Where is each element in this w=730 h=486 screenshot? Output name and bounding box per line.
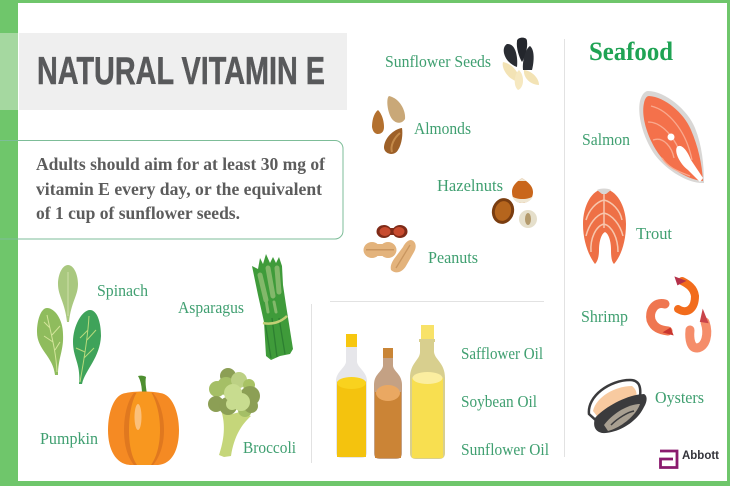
panel: seafood (581, 37, 719, 468)
label: Trout: Trout (636, 224, 672, 243)
icon: almonds (372, 96, 405, 154)
label: Sunflower Oil: Sunflower Oil (461, 440, 549, 459)
icon: oyster (589, 380, 647, 433)
label: Pumpkin: Pumpkin (40, 429, 98, 448)
icon: trout steak (583, 188, 626, 264)
icon: hazelnuts (489, 178, 537, 228)
label: Salmon: Salmon (582, 130, 630, 149)
callout: daily recommendation: of 1 cup of sunflower seeds. (36, 203, 240, 223)
label: Spinach: Spinach (97, 281, 148, 300)
icon: asparagus (252, 254, 293, 360)
label: Oysters: Oysters (655, 388, 704, 407)
label: Shrimp: Shrimp (581, 307, 628, 326)
label: Almonds: Almonds (414, 119, 471, 138)
logo: Abbott (660, 448, 719, 468)
icon: sunflower seeds (503, 38, 539, 90)
icon: spinach (37, 265, 101, 384)
panel: vegetables (37, 254, 296, 465)
title banner: NATURAL VITAMIN E (37, 50, 325, 93)
label: Sunflower Seeds: Sunflower Seeds (385, 52, 491, 71)
callout: daily recommendation: Adults should aim for at least 30 mg of (36, 154, 326, 174)
icon: soybean oil bottle (374, 348, 402, 459)
label: Broccoli: Broccoli (243, 438, 296, 457)
icon: peanuts (364, 225, 416, 272)
logo: Abbott: Abbott (682, 448, 719, 462)
label: Safflower Oil: Safflower Oil (461, 344, 543, 363)
icon: safflower oil bottle (336, 334, 367, 458)
panel: oils (336, 325, 549, 459)
title banner (0, 33, 347, 110)
icon: broccoli (208, 368, 260, 457)
callout: daily recommendation (0, 140, 343, 239)
label: Peanuts: Peanuts (428, 248, 478, 267)
label: Asparagus: Asparagus (178, 298, 244, 317)
callout: daily recommendation: vitamin E every day, or the equivalent (36, 179, 322, 199)
label: Soybean Oil: Soybean Oil (461, 392, 537, 411)
icon: sunflower oil bottle (410, 325, 445, 459)
heading: Seafood: Seafood (589, 37, 674, 66)
icon: pumpkin (108, 376, 179, 465)
label: Hazelnuts: Hazelnuts (437, 176, 503, 195)
panel: seeds and nuts (364, 38, 539, 272)
icon: shrimp (651, 278, 707, 348)
icon: salmon steak (639, 91, 704, 183)
